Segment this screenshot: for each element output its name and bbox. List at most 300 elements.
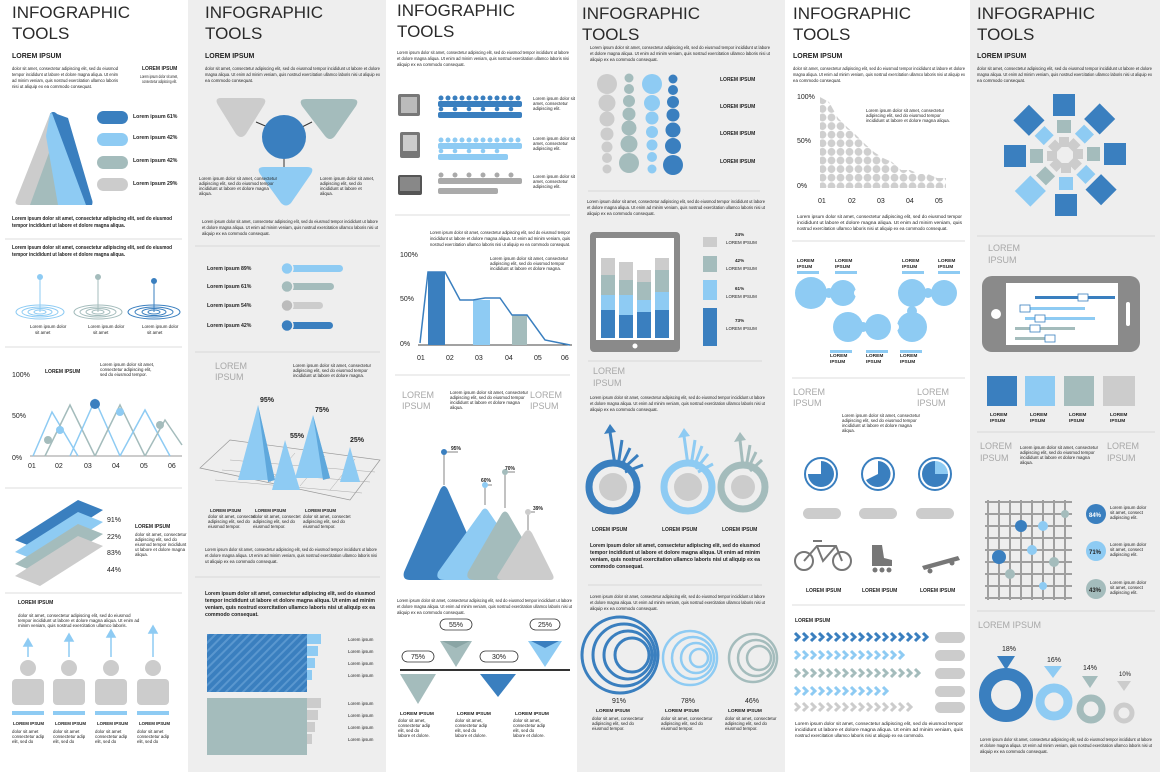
title col6: TOOLS <box>977 25 1034 44</box>
text block col4 d: tempor incididunt ut labore et dolore magna aliqua. Ut enim ad minim <box>590 550 760 556</box>
chart: line area chart col3 <box>400 252 572 362</box>
panel: column 2 <box>195 3 381 755</box>
text block col1 <box>12 216 172 229</box>
chart: dot decline chart: 100% <box>797 94 815 101</box>
text block col4 c: Lorem ipsum dolor sit amet, consectetur adipiscing elit, sed do eiusmod tempor incididunt ut labore <box>590 395 765 400</box>
chart: grid with dots: Lorem ipsum dolor <box>1110 505 1147 510</box>
text block col3 d <box>397 598 573 615</box>
text columns col2: eiusmod tempor. <box>303 524 335 529</box>
chart: triangle seesaw: 30% <box>492 654 506 661</box>
chart: overlapping triangles line chart: 50% <box>12 413 26 420</box>
chart: bubble columns: LOREM IPSUM <box>720 131 755 137</box>
text block col2 c: incididunt ut labore et dolore magna. <box>293 373 364 378</box>
chart: triangle seesaw: 55% <box>449 622 463 629</box>
text block col1 intro: Lorem ipsum dolor sit amet, <box>140 74 178 79</box>
chart: grid with dots: adipiscing elit. <box>1110 590 1138 595</box>
title col6: INFOGRAPHIC <box>977 4 1095 23</box>
text block col1 intro: LOREM IPSUM <box>142 66 177 72</box>
diagram: puzzle pieces: IPSUM <box>866 359 881 365</box>
chart: progress bars: Lorem ipsum 89% <box>207 266 252 272</box>
heading col3 gray: LOREM <box>402 390 434 400</box>
text columns col2: LOREM IPSUM <box>305 508 336 513</box>
diagram: circle with triangles: aliqua. <box>199 191 212 196</box>
chart: concentric circles: LOREM IPSUM <box>728 708 762 714</box>
legend: tablet percentages: LOREM IPSUM <box>726 266 757 271</box>
diagram: puzzle pieces: LOREM <box>797 258 814 264</box>
chart: triangle seesaw: consectetur adip <box>455 723 488 728</box>
chart: progress bars: Lorem ipsum 42% <box>207 323 252 329</box>
text block col5 b <box>797 214 963 231</box>
chart: overlapping triangles line chart: consectetur adipiscing elit, <box>100 367 152 372</box>
text block col1 b: Lorem ipsum dolor sit amet, consectetur adipiscing elit, sed do eiusmod <box>12 245 172 251</box>
chart: staircase blocks: Lorem ipsum <box>348 637 374 642</box>
icons: people with arrows: dolor sit amet <box>137 729 164 734</box>
panel: column 6 <box>977 4 1155 754</box>
chart: staircase blocks: Lorem ipsum <box>348 713 374 718</box>
chart: grid with dots: sit amet, consect <box>1110 547 1144 552</box>
legend: color squares: IPSUM <box>990 418 1005 424</box>
chart: staircase blocks: Lorem ipsum <box>348 701 374 706</box>
chart: bubble columns <box>597 74 755 175</box>
chart: 3d cones <box>200 397 380 500</box>
legend: color squares <box>987 376 1135 424</box>
chart: mountains: 60% <box>481 478 492 484</box>
text block col2 e <box>205 591 375 618</box>
chart: donuts with triangles: 10% <box>1119 672 1132 678</box>
panel: column 1 <box>5 3 187 744</box>
text block col5 b: Lorem ipsum dolor sit amet, consectetur adipiscing elit, sed do eiusmod tempor <box>797 214 963 219</box>
legend: color squares: LOREM <box>1030 412 1047 418</box>
chart: donuts with triangles <box>985 646 1132 721</box>
chart: ripple pins: sit amet <box>93 330 109 335</box>
chart: overlapping triangles line chart: Lorem ipsum dolor sit amet, <box>100 362 154 367</box>
text columns col4: dolor sit amet, consectetur <box>661 716 713 721</box>
diagram: circle with triangles <box>199 98 374 206</box>
text block col5 c: adipiscing elit, sed do eiusmod tempor <box>842 418 917 423</box>
chart: mountains: 70% <box>505 466 516 472</box>
diagram: circle with triangles: incididunt ut labore et dolore magna <box>199 186 269 191</box>
heading col3 gray: LOREM <box>530 390 562 400</box>
chart: tablet stacked bars <box>590 232 680 352</box>
chart: overlapping triangles line chart: 05 <box>140 463 148 470</box>
chart: triangle seesaw: 75% <box>411 654 425 661</box>
chart: staircase blocks: Lorem ipsum <box>348 725 374 730</box>
chart: line area chart col3: 100% <box>400 252 418 259</box>
chart: dot decline chart: 02 <box>848 198 856 205</box>
text block col5 d: incididunt ut labore et dolore magna aliqua. Ut enim ad minim veniam, quis <box>795 727 964 732</box>
chart: dot decline chart <box>797 94 950 205</box>
icons: bike skate board: LOREM IPSUM <box>920 588 955 594</box>
chart: 3d stacked bars: adipiscing elit, sed do <box>135 537 178 542</box>
icons: devices and people rows: amet, consectetur <box>533 141 568 146</box>
text block col5 b: incididunt ut labore et dolore magna aliqua. Ut enim ad minim veniam, quis <box>797 220 963 225</box>
chart: triangle seesaw: consectetur adip <box>398 723 431 728</box>
icons: people with arrows: consectetur adip <box>53 734 86 739</box>
text block col5 c: Lorem ipsum dolor sit amet, consectetur <box>842 413 921 418</box>
icons: devices and people rows: adipiscing elit. <box>533 106 561 111</box>
diagram: square starburst <box>1004 94 1126 216</box>
heading col4 gray: IPSUM <box>593 378 622 388</box>
icons: people with arrows: dolor sit amet <box>95 729 122 734</box>
diagram: puzzle pieces: IPSUM <box>938 264 953 270</box>
icons: devices and people rows: Lorem ipsum dolor sit <box>533 174 576 179</box>
chart: mountains: 95% <box>451 446 462 452</box>
text block col6: ea commodo consequat. <box>977 78 1025 83</box>
legend: color squares: IPSUM <box>1069 418 1084 424</box>
diagram: puzzle pieces <box>795 258 960 365</box>
heading col6 gray b: LOREM <box>1107 441 1139 451</box>
chart: rings with arrows: LOREM IPSUM <box>662 527 697 533</box>
text block col4 d <box>590 543 760 570</box>
text block col2 c: adipiscing elit, sed do eiusmod tempor <box>293 368 368 373</box>
chart: dot decline chart: adipiscing elit, sed do eiusmod tempor <box>866 113 941 118</box>
icons: people with arrows: consectetur adip <box>137 734 170 739</box>
diagram: puzzle pieces: LOREM <box>866 353 883 359</box>
legend: tablet percentages: 42% <box>735 258 744 263</box>
icon: phone gantt <box>982 276 1140 352</box>
icons: people with arrows: LOREM IPSUM <box>139 721 170 726</box>
chart: line area chart col3: 06 <box>561 355 569 362</box>
text columns col2: adipiscing elit, sed do <box>253 519 296 524</box>
text block col3 d: et dolore magna aliqua. Ut enim ad minim veniam, quis nostrud exercitation ullamco laboris nisi ut <box>397 604 573 609</box>
chart: line area chart col3: 03 <box>475 355 483 362</box>
chart: bubble columns: LOREM IPSUM <box>720 104 755 110</box>
chart: overlapping triangles line chart: 100% <box>12 372 30 379</box>
text block col4 b: et dolore magna aliqua. Ut enim ad minim veniam, quis nostrud exercitation ullamco laboris nisi ut <box>587 205 766 210</box>
chart: grid with dots: adipiscing elit. <box>1110 515 1138 520</box>
icons: bike skate board <box>795 541 960 594</box>
diagram: circle with triangles: aliqua. <box>320 191 333 196</box>
text block col1 intro <box>12 66 178 89</box>
chart: line area chart col3: 50% <box>400 296 414 303</box>
text block col2 e: commodo consequat. <box>205 612 259 618</box>
text columns col4: adipiscing elit, sed do <box>661 721 704 726</box>
title col1: TOOLS <box>12 24 69 43</box>
text columns col2: adipiscing elit, sed do <box>208 519 251 524</box>
legend: tablet percentages <box>703 232 757 346</box>
diagram: puzzle pieces: IPSUM <box>902 264 917 270</box>
heading col6 gray b: LOREM <box>980 441 1012 451</box>
chart: dot decline chart: 0% <box>797 183 807 190</box>
heading col2 gray: LOREM <box>215 361 247 371</box>
icons: bike skate board: LOREM IPSUM <box>862 588 897 594</box>
chart: overlapping triangles line chart: LOREM IPSUM <box>45 369 80 375</box>
text block col2 d: ut aliquip ex ea commodo consequat. <box>205 559 278 564</box>
text columns col4: adipiscing elit, sed do <box>725 721 768 726</box>
chart: grid with dots: Lorem ipsum dolor <box>1110 542 1147 547</box>
legend pills col1: Lorem ipsum 29% <box>133 181 178 187</box>
text block col4: Lorem ipsum dolor sit amet, consectetur adipiscing elit, sed do eiusmod tempor incididunt ut labore <box>590 45 771 50</box>
chart: overlapping triangles line chart: 02 <box>55 463 63 470</box>
icons: devices and people rows <box>398 94 576 195</box>
text block col6 b: adipiscing elit, sed do eiusmod tempor <box>1020 450 1095 455</box>
chart: concentric circles <box>582 617 777 714</box>
title col5: INFOGRAPHIC <box>793 4 911 23</box>
chart: chevron rows <box>795 632 965 713</box>
text block col5: ea commodo consequat. <box>793 78 841 83</box>
heading col6: LOREM IPSUM <box>977 53 1027 60</box>
chart: dot decline chart: Lorem ipsum dolor sit amet, consectetur <box>866 108 945 113</box>
text block col1 people: dolor sit amet, consectetur adipiscing elit, sed do eiusmod <box>18 613 131 618</box>
chart: rings with arrows <box>589 424 765 533</box>
chart: mountains <box>404 446 554 580</box>
icons: people with arrows: dolor sit amet <box>53 729 80 734</box>
text columns col4: dolor sit amet, consectetur <box>725 716 777 721</box>
chart: 3d stacked bars: 44% <box>107 567 121 574</box>
chart: ripple pins <box>16 274 180 335</box>
title col3: INFOGRAPHIC <box>397 1 515 20</box>
heading col4 gray: LOREM <box>593 366 625 376</box>
text block col2: magna aliqua. Ut enim ad minim veniam, quis nostrud exercitation ullamco laboris nisi ut aliquip ex <box>205 72 381 77</box>
chart: triangle seesaw: dolor sit amet, <box>513 718 541 723</box>
text block col3: et dolore magna aliqua. Ut enim ad minim veniam, quis nostrud exercitation ullamco laboris nisi <box>397 56 569 61</box>
text block col1: tempor incididunt ut labore et dolore magna aliqua. <box>12 223 125 229</box>
chart: donuts with triangles: 18% <box>1002 646 1016 653</box>
text block col2: dolor sit amet, consectetur adipiscing elit, sed do eiusmod tempor incididunt ut labore et dolore <box>205 66 381 71</box>
text columns col4: adipiscing elit, sed do <box>592 721 635 726</box>
heading col5 gray <box>793 387 949 408</box>
text block col4 d: Lorem ipsum dolor sit amet, consectetur adipiscing elit, sed do eiusmod <box>590 543 760 549</box>
chart: progress bars: Lorem ipsum 61% <box>207 284 252 290</box>
icons: people with arrows: elit, sed do <box>53 739 75 744</box>
text block col6 b: aliqua. <box>1020 460 1033 465</box>
text columns col4: eiusmod tempor. <box>725 726 757 731</box>
heading col6 gray: LOREM <box>988 243 1020 253</box>
text block col2 d: Lorem ipsum dolor sit amet, consectetur adipiscing elit, sed do eiusmod tempor incididunt ut labore <box>205 547 377 552</box>
title col5 <box>793 4 911 44</box>
text block col6 b <box>1020 445 1099 465</box>
text columns col2: eiusmod tempor. <box>208 524 240 529</box>
text block col2 b: aliquip ex ea commodo consequat. <box>202 231 270 236</box>
text block col6 d: aliquip ex ea commodo consequat. <box>980 749 1048 754</box>
text block col1 intro: ad minim veniam, quis nostrud exercitation ullamco laboris <box>12 78 119 83</box>
icons: devices and people rows: Lorem ipsum dolor sit <box>533 96 576 101</box>
text block col5 b: nostrud exercitation ullamco laboris nisi ut aliquip ex ea commodo consequat. <box>797 226 948 231</box>
heading col5 gray: LOREM <box>793 387 825 397</box>
heading col1 people: LOREM IPSUM <box>18 600 53 606</box>
title col6 <box>977 4 1095 44</box>
legend: tablet percentages: LOREM IPSUM <box>726 294 757 299</box>
text block col2: ea commodo consequat. <box>205 78 253 83</box>
text block col4 d: veniam, quis nostrud exercitation ullamco laboris nisi ut aliquip ex ea <box>590 557 760 563</box>
text columns col2: dolor sit amet, consectet <box>303 514 351 519</box>
text block col2 e: veniam, quis nostrud exercitation ullamco laboris nisi ut aliquip ex ea <box>205 605 375 611</box>
chart: 3d stacked bars: 91% <box>107 517 121 524</box>
icons: devices and people rows: adipiscing elit. <box>533 184 561 189</box>
diagram: puzzle pieces: IPSUM <box>830 359 845 365</box>
chart: concentric circles: LOREM IPSUM <box>665 708 699 714</box>
chart: 3d stacked bars: LOREM IPSUM <box>135 524 170 530</box>
diagram: puzzle pieces: LOREM <box>835 258 852 264</box>
chart: 3d stacked bars: ut labore et dolore magna <box>135 547 186 552</box>
heading col2: LOREM IPSUM <box>205 53 255 60</box>
legend: color squares: IPSUM <box>1030 418 1045 424</box>
heading col2 gray: IPSUM <box>215 372 244 382</box>
text block col3 c <box>450 390 529 410</box>
panel: column 4 <box>582 4 777 731</box>
title col5: TOOLS <box>793 25 850 44</box>
title col4: TOOLS <box>582 25 639 44</box>
text block col2 <box>205 66 381 83</box>
text columns col2: adipiscing elit, sed do <box>303 519 346 524</box>
chart: staircase blocks: Lorem ipsum <box>348 673 374 678</box>
text block col6 <box>977 66 1153 83</box>
diagram: circle with triangles: Lorem ipsum dolor sit amet, <box>320 176 374 181</box>
chart: grid with dots <box>985 500 1147 600</box>
text block col3: aliquip ex ea commodo consequat. <box>397 62 465 67</box>
chart: 3d stacked bars <box>15 500 187 586</box>
chart: triangle seesaw: LOREM IPSUM <box>515 711 549 717</box>
heading col3 gray <box>402 390 562 411</box>
legend: tablet percentages: LOREM IPSUM <box>726 326 757 331</box>
text block col2 b: et dolore magna aliqua. Ut enim ad minim veniam, quis nostrud exercitation ullamco laboris nisi ut <box>202 225 379 230</box>
chart: dot decline chart: 03 <box>877 198 885 205</box>
chart: grid with dots: 84% <box>1089 513 1102 519</box>
text block col4: aliquip ex ea commodo consequat. <box>590 57 658 62</box>
chart: 3d cones: 55% <box>290 433 305 440</box>
text block col6: dolor sit amet, consectetur adipiscing elit, sed do eiusmod tempor incididunt ut labore et dolore <box>977 66 1153 71</box>
text block col3 b: nostrud exercitation ullamco laboris nisi ut aliquip ex ea commodo consequat. <box>430 242 570 247</box>
text block col3: Lorem ipsum dolor sit amet, consectetur adipiscing elit, sed do eiusmod tempor incididunt ut labore <box>397 50 569 55</box>
chart: staircase blocks: Lorem ipsum <box>348 661 374 666</box>
text block col3 d: aliquip ex ea commodo consequat. <box>397 610 465 615</box>
text block col3 c: incididunt ut labore et dolore magna <box>450 400 520 405</box>
panel: column 5 <box>792 4 966 738</box>
text block col2 b: Lorem ipsum dolor sit amet, consectetur adipiscing elit, sed do eiusmod tempor incididunt ut labore <box>202 219 379 224</box>
title col4: INFOGRAPHIC <box>582 4 700 23</box>
heading col1: LOREM IPSUM <box>12 53 62 60</box>
chart: triangle seesaw: elit, sed do <box>513 728 535 733</box>
text block col4 e: Lorem ipsum dolor sit amet, consectetur adipiscing elit, sed do eiusmod tempor incididunt ut labore <box>590 594 765 599</box>
text block col3 b: Lorem ipsum dolor sit amet, consectetur adipiscing elit, sed do eiusmod tempor <box>430 230 570 235</box>
chart: line area chart col3: adipiscing elit, sed do eiusmod tempor <box>490 261 565 266</box>
heading col5: LOREM IPSUM <box>793 53 843 60</box>
chart: progress bars: Lorem ipsum 54% <box>207 303 252 309</box>
chart: dot decline chart: incididunt ut labore et dolore magna aliqua. <box>866 118 950 123</box>
text columns col2: LOREM IPSUM <box>255 508 286 513</box>
chart: rings with arrows: LOREM IPSUM <box>592 527 627 533</box>
chart: 3d cones: 75% <box>315 407 330 414</box>
text block col5 d: Lorem ipsum dolor sit amet, consectetur adipiscing elit, sed do eiusmod tempor <box>795 721 964 726</box>
legend: color squares: LOREM <box>990 412 1007 418</box>
legend: color squares: IPSUM <box>1110 418 1125 424</box>
legend: tablet percentages: LOREM IPSUM <box>726 240 757 245</box>
chart: 3d stacked bars: eiusmod tempor incididunt <box>135 542 187 547</box>
text block col2 d: et dolore magna aliqua. Ut enim ad minim veniam, quis nostrud exercitation ullamco laboris nisi <box>205 553 377 558</box>
chart: 3d cones: 25% <box>350 437 365 444</box>
text block col4 <box>590 45 771 62</box>
chart: overlapping triangles line chart: sed do eiusmod tempor. <box>100 372 147 377</box>
diagram: puzzle pieces: LOREM <box>900 353 917 359</box>
text block col4 c <box>590 395 766 412</box>
text block col1 b: tempor incididunt ut labore et dolore magna aliqua. <box>12 252 125 258</box>
text block col1 intro: dolor sit amet, consectetur adipiscing elit, sed do eiusmod <box>12 66 119 71</box>
title col2 <box>205 3 323 43</box>
chart: grid with dots: 71% <box>1089 550 1102 556</box>
chart: grid with dots: 43% <box>1089 588 1102 594</box>
legend pills col1 <box>97 111 178 191</box>
icons: devices and people rows: amet, consectetur <box>533 179 568 184</box>
heading col6 gray b <box>980 441 1139 463</box>
heading col6 gray b: IPSUM <box>980 453 1009 463</box>
title col4 <box>582 4 700 44</box>
chart: donuts with triangles: 16% <box>1047 657 1061 664</box>
icons: people with arrows: LOREM IPSUM <box>13 721 44 726</box>
chart: concentric circles: 46% <box>745 698 759 705</box>
chart: triangle seesaw: dolor sit amet, <box>455 718 483 723</box>
chart: bubble columns: LOREM IPSUM <box>720 77 755 83</box>
chart: staircase blocks: Lorem ipsum <box>348 737 374 742</box>
chart: grid with dots: sit amet, consect <box>1110 510 1144 515</box>
text block col4 d: commodo consequat. <box>590 564 644 570</box>
icons: people with arrows: consectetur adip <box>12 734 45 739</box>
chart: triangle seesaw <box>398 619 570 738</box>
legend: color squares: LOREM <box>1069 412 1086 418</box>
icons: people with arrows: consectetur adip <box>95 734 128 739</box>
text block col6 b: Lorem ipsum dolor sit amet, consectetur <box>1020 445 1099 450</box>
text block col4 b: Lorem ipsum dolor sit amet, consectetur adipiscing elit, sed do eiusmod tempor incididunt ut labore <box>587 199 766 204</box>
heading col6 gray c: LOREM IPSUM <box>978 620 1041 630</box>
chart: line area chart col3: 0% <box>400 341 410 348</box>
heading col6 gray b: IPSUM <box>1107 453 1136 463</box>
text block col4 b <box>587 199 766 216</box>
icons: people with arrows: elit, sed do <box>137 739 159 744</box>
chart: 3d cones: 95% <box>260 397 275 404</box>
icons: devices and people rows: amet, consectetur <box>533 101 568 106</box>
legend pills col1: Lorem ipsum 42% <box>133 135 178 141</box>
text columns col4 <box>592 716 777 731</box>
chart: ripple pins: sit amet <box>147 330 163 335</box>
title col1: INFOGRAPHIC <box>12 3 130 22</box>
legend pills col1: Lorem ipsum 42% <box>133 158 178 164</box>
chart: grid with dots: adipiscing elit. <box>1110 552 1138 557</box>
icons: people with arrows: elit, sed do <box>95 739 117 744</box>
text block col5 <box>793 66 966 83</box>
diagram: circle with triangles: adipiscing elit, sed do <box>320 181 363 186</box>
chart: donuts with triangles: 14% <box>1083 665 1097 672</box>
text block col3 b: incididunt ut labore et dolore magna aliqua. Ut enim ad minim veniam, quis <box>430 236 571 241</box>
text block col4 e: et dolore magna aliqua. Ut enim ad minim veniam, quis nostrud exercitation ullamco laboris nisi ut <box>590 600 766 605</box>
chart: overlapping triangles line chart <box>12 362 182 470</box>
icons: devices and people rows: Lorem ipsum dolor sit <box>533 136 576 141</box>
text block col3 c: aliqua. <box>450 405 463 410</box>
diagram: circle with triangles: incididunt ut labore et <box>320 186 363 191</box>
chart: triangle seesaw: elit, sed do <box>398 728 420 733</box>
title col3 <box>397 1 515 41</box>
text block col3 c: Lorem ipsum dolor sit amet, consectetur <box>450 390 529 395</box>
chart: concentric circles: LOREM IPSUM <box>596 708 630 714</box>
icons: people with arrows: LOREM IPSUM <box>97 721 128 726</box>
heading col2 gray <box>215 361 247 382</box>
diagram: puzzle pieces: LOREM <box>830 353 847 359</box>
icons: people with arrows: elit, sed do <box>12 739 34 744</box>
heading col6 gray: IPSUM <box>988 255 1017 265</box>
legend pills col1: Lorem ipsum 61% <box>133 114 178 120</box>
heading col5 chevrons: LOREM IPSUM <box>795 618 830 624</box>
text block col1 people <box>18 613 140 628</box>
text block col4 e <box>590 594 766 611</box>
diagram: puzzle pieces: LOREM <box>938 258 955 264</box>
chart: triangle seesaw: labore et dolore. <box>455 733 487 738</box>
text block col1 intro: nisi ut aliquip ex ea commodo consequat. <box>12 84 92 89</box>
chart: concentric circles: 91% <box>612 698 626 705</box>
legend: tablet percentages: 24% <box>735 232 744 237</box>
text block col5: magna aliqua. Ut enim ad minim veniam, quis nostrud exercitation ullamco laboris nisi ut aliquip ex <box>793 72 966 77</box>
chart: 3d stacked bars: 83% <box>107 550 121 557</box>
chart: ripple pins: Lorem ipsum dolor <box>88 324 125 329</box>
text block col5 d: nostrud exercitation ullamco laboris nisi ut aliquip ex ea commodo. <box>795 733 924 738</box>
title col1 <box>12 3 130 43</box>
